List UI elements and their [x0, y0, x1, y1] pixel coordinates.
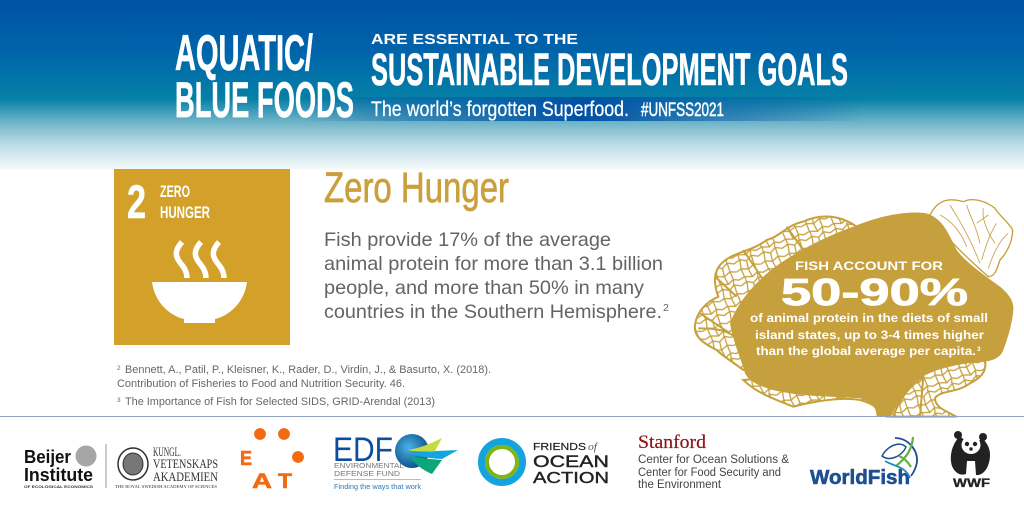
title: aquatic blue foods: [175, 25, 354, 128]
icon: steaming bowl: [152, 242, 247, 323]
footnotes: [117, 364, 491, 408]
SDG 2 tile: ZERO: [160, 183, 190, 201]
footnotes: Bennett, A., Patil, P., Kleisner, K., Rader, D., Virdin, J., & Basurto, X. (2018).: [125, 364, 491, 376]
logo: Beijer Institute: Beijer: [24, 447, 71, 467]
logo: EDF: [333, 431, 458, 491]
logo: Royal Swedish Academy: THE ROYAL SWEDISH ACADEMY OF SCIENCES: [115, 484, 218, 489]
footnotes: The Importance of Fish for Selected SIDS, GRID-Arendal (2013): [125, 396, 435, 408]
logo: WorldFish: [810, 437, 917, 489]
footnotes: Contribution of Fisheries to Food and Nutrition Security. 46.: [117, 378, 405, 390]
logo: Friends of Ocean Action: FRIENDS: [533, 441, 586, 453]
bottom lattice lobes: [743, 360, 985, 417]
logo: Stanford: Center for Food Security and: [638, 467, 781, 479]
logo: Friends of Ocean Action: [482, 441, 609, 487]
logo: WorldFish: WorldFish: [810, 467, 910, 489]
tagline band: [300, 97, 865, 121]
callout text: than the global average per capita.: [756, 344, 976, 358]
lobe ribs: [698, 227, 803, 337]
logo: Royal Swedish Academy: VETENSKAPS: [153, 457, 218, 471]
footnotes: 3: [117, 397, 121, 404]
logo: Beijer Institute: OF ECOLOGICAL ECONOMICS: [24, 485, 94, 489]
heading: sustainable development goals: ARE ESSENTIAL TO THE: [371, 31, 578, 48]
logo: Beijer Institute: [24, 446, 96, 489]
callout text: 50-90%: [781, 272, 968, 314]
logo: WWF panda: [951, 431, 990, 490]
logo: Stanford: [638, 432, 789, 491]
logo: EAT: E: [240, 448, 252, 470]
callout text: 3: [977, 346, 981, 353]
body text: countries in the Southern Hemisphere.: [324, 301, 662, 323]
logo: EDF: Finding the ways that work: [334, 482, 421, 491]
logo: Royal Swedish Academy: KUNGL.: [153, 445, 181, 459]
left lattice lobes: [695, 216, 887, 370]
logo: Friends of Ocean Action: ACTION: [533, 470, 609, 487]
callout text: [750, 261, 988, 358]
logo: Royal Swedish Academy: AKADEMIEN: [153, 470, 218, 484]
logo: EDF: EDF: [333, 431, 393, 469]
logo: EDF: DEFENSE FUND: [334, 469, 401, 478]
logo: Royal Swedish Academy: [115, 445, 218, 489]
logo: Beijer Institute: Institute: [24, 465, 93, 485]
illustration: coral tree: [695, 200, 1013, 417]
footnotes: 2: [117, 365, 121, 372]
title: aquatic blue foods: AQUATIC/: [175, 25, 313, 81]
title: aquatic blue foods: BLUE FOODS: [175, 72, 354, 128]
SDG 2 tile: HUNGER: [160, 204, 210, 222]
divider between logos: [106, 444, 107, 488]
SDG 2 tile: [114, 169, 290, 345]
body text: 2: [663, 302, 669, 314]
logo: WWF panda: WWF: [953, 476, 990, 490]
logo: EDF: ENVIRONMENTAL: [334, 461, 404, 470]
callout: fish account for 50-90%: [695, 200, 1013, 417]
callout text: island states, up to 3-4 times higher: [755, 328, 984, 342]
tagline: #UNFSS2021: [641, 100, 724, 121]
logo: EAT: T: [278, 470, 292, 493]
logo: Friends of Ocean Action: OCEAN: [533, 452, 609, 471]
SDG 2 tile: 2: [127, 175, 146, 228]
logo: Friends of Ocean Action: of: [588, 442, 598, 453]
body text: animal protein for more than 3.1 billion: [324, 253, 663, 275]
body text: people, and more than 50% in many: [324, 277, 644, 299]
footer divider: [0, 416, 1024, 417]
header gradient background: [0, 0, 1024, 170]
top right outlined leaf: [930, 200, 1013, 277]
body text: Fish provide 17% of the average: [324, 229, 611, 251]
logo: Stanford: the Environment: [638, 479, 722, 491]
logo: Stanford: Center for Ocean Solutions &: [638, 454, 789, 466]
tagline: The world’s forgotten Superfood.: [371, 98, 629, 121]
callout text: FISH ACCOUNT FOR: [795, 261, 944, 273]
main blob: [730, 212, 1013, 417]
heading: zero hunger: Zero Hunger: [324, 164, 509, 212]
trunk branches: [893, 377, 923, 417]
body text: [324, 229, 669, 323]
heading: sustainable development goals: [371, 31, 848, 95]
logo: Stanford: Stanford: [638, 432, 707, 453]
callout text: of animal protein in the diets of small: [750, 311, 988, 325]
logo: EAT: [240, 428, 304, 493]
logo: EAT: A: [252, 470, 272, 493]
